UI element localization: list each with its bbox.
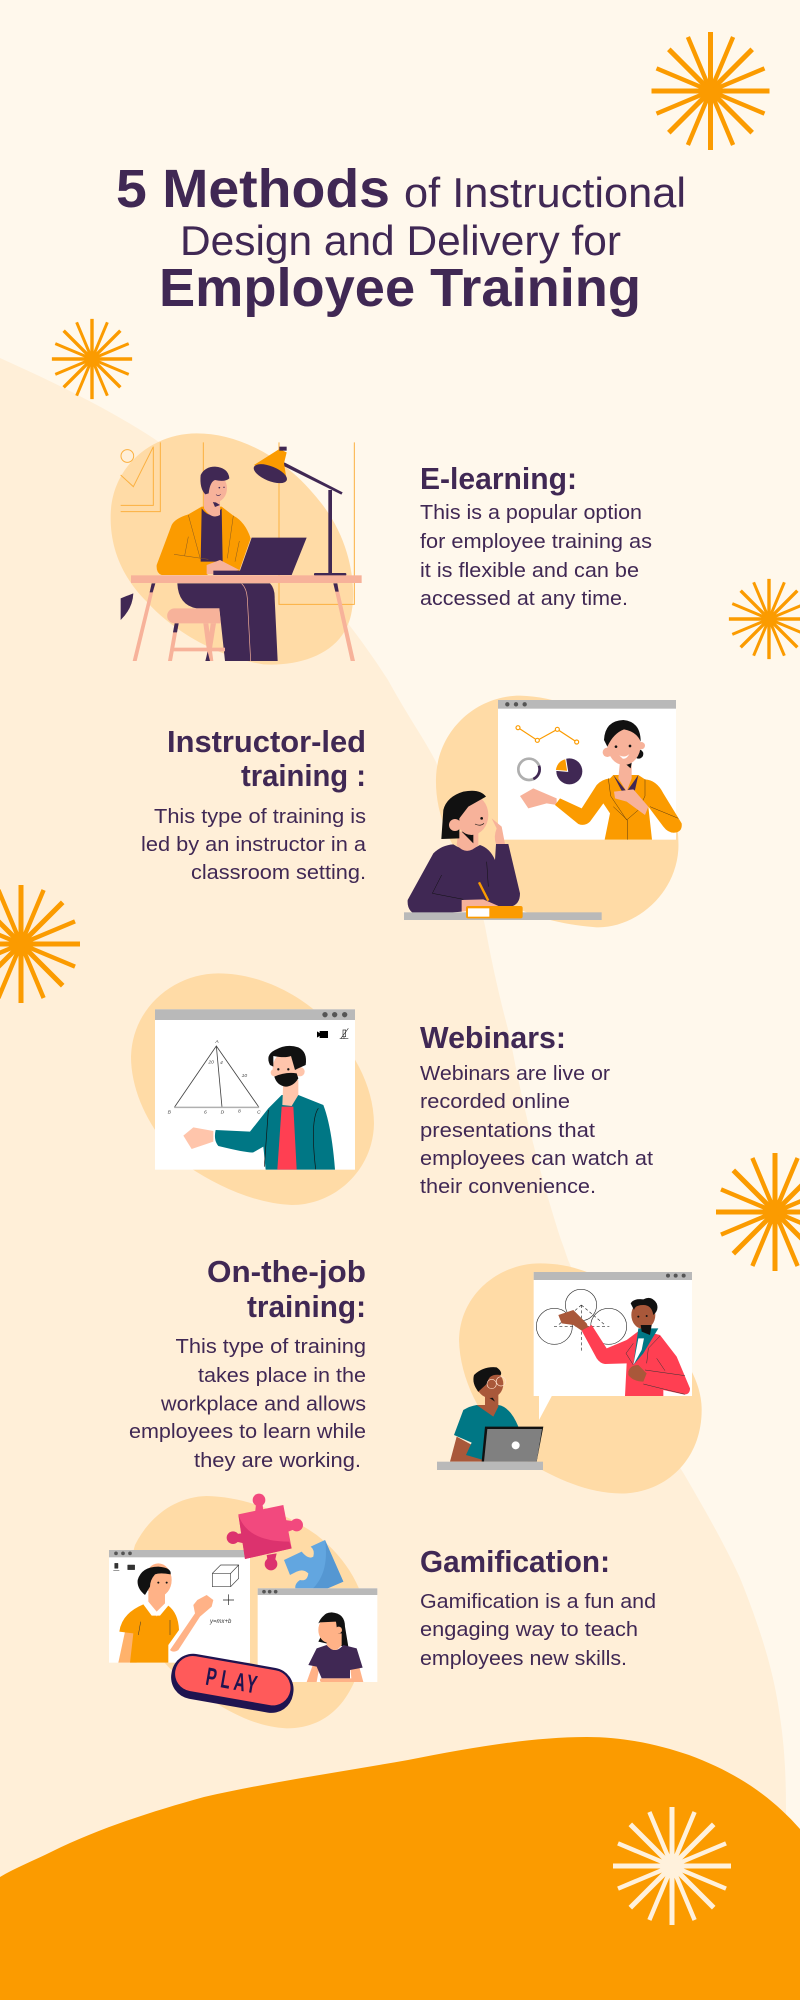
icon: camera xyxy=(317,1031,328,1038)
student man with laptop xyxy=(437,1367,543,1470)
heading: e-learning: E-learning: xyxy=(420,461,577,496)
text: gamification body: engaging way to teach xyxy=(420,1619,638,1641)
starburst: right lower xyxy=(716,1153,800,1271)
bottom orange wave xyxy=(0,1737,800,2000)
text: instructor-led body: This type of training is xyxy=(154,806,366,828)
triangle diagram: 4 xyxy=(220,1060,223,1066)
blob xyxy=(131,1496,367,1728)
heading: on-the-job: training: xyxy=(247,1289,366,1324)
starburst: left middle xyxy=(0,885,80,1003)
browser window xyxy=(498,700,676,840)
triangle diagram: C xyxy=(257,1109,261,1115)
donut chart xyxy=(518,759,540,780)
desk and book xyxy=(404,906,602,920)
title: Employee Training xyxy=(159,258,641,318)
plant leaf xyxy=(121,593,133,620)
text: webinars body: their convenience. xyxy=(420,1176,596,1198)
heading: on-the-job xyxy=(207,1254,366,1324)
heading: instructor-led: Instructor-led xyxy=(167,724,366,759)
triangle diagram: D xyxy=(221,1110,225,1116)
stool xyxy=(167,608,225,661)
desk xyxy=(131,575,362,661)
triangle diagram: 20 xyxy=(207,1059,214,1065)
triangle diagram: 8 xyxy=(238,1108,241,1114)
triangle diagram: A xyxy=(214,1039,219,1045)
text: on-the-job body: workplace and allows xyxy=(160,1394,366,1416)
heading: webinars: Webinars: xyxy=(420,1020,566,1055)
puzzle piece: blue xyxy=(284,1540,343,1592)
starburst: right middle xyxy=(729,579,800,659)
text: webinars body xyxy=(420,1063,653,1198)
triangle diagram: 10 xyxy=(242,1073,247,1079)
student woman xyxy=(408,791,520,916)
wall frames xyxy=(121,442,354,604)
triangle diagram xyxy=(168,1039,261,1116)
line chart xyxy=(516,726,579,744)
person in orange polo xyxy=(118,1563,213,1663)
text: instructor-led body: led by an instructor in a xyxy=(141,834,367,856)
text: gamification body xyxy=(420,1591,656,1670)
puzzle piece: pink xyxy=(227,1494,303,1570)
triangle diagram: B xyxy=(168,1109,172,1115)
title: Design and Delivery for xyxy=(180,217,621,264)
panel: on-the-job illustration xyxy=(437,1263,702,1493)
text: webinars body: employees can watch at xyxy=(420,1148,653,1170)
icon: mic and camera xyxy=(113,1563,135,1571)
text: on-the-job body: employees to learn while xyxy=(129,1421,366,1443)
text: webinars body: Webinars are live or xyxy=(420,1063,610,1085)
text: e-learning body: This is a popular option xyxy=(420,502,642,524)
cube, plus and formula: y=mx+b xyxy=(209,1619,232,1625)
blob xyxy=(459,1263,702,1493)
desk lamp xyxy=(251,447,346,576)
heading: instructor-led xyxy=(167,724,366,793)
text: on-the-job body: takes place in the xyxy=(198,1365,366,1387)
blob xyxy=(131,973,374,1205)
starburst: top right xyxy=(652,32,770,150)
blob xyxy=(111,433,353,665)
person in purple shirt xyxy=(307,1612,363,1682)
circles diagram xyxy=(536,1289,627,1352)
title: 5 Methods xyxy=(116,159,390,219)
pie chart xyxy=(555,758,582,784)
blob xyxy=(436,696,678,927)
starburst: upper left xyxy=(52,319,132,399)
text: gamification body: Gamification is a fun and xyxy=(420,1591,656,1613)
panel: e-learning illustration xyxy=(111,433,362,665)
triangle diagram: 6 xyxy=(204,1110,207,1116)
text: gamification body: employees new skills. xyxy=(420,1648,627,1670)
text: e-learning body: accessed at any time. xyxy=(420,588,628,610)
title xyxy=(116,159,686,318)
starburst: bottom white xyxy=(613,1807,731,1925)
text: e-learning body: it is flexible and can be xyxy=(420,560,639,582)
heading: on-the-job: On-the-job xyxy=(207,1254,366,1289)
text: on-the-job body xyxy=(129,1336,366,1472)
play button: PLAY xyxy=(204,1663,259,1699)
heading: gamification: Gamification: xyxy=(420,1544,610,1579)
text: e-learning body: for employee training as xyxy=(420,531,652,553)
text: webinars body: presentations that xyxy=(420,1120,595,1142)
title: of Instructional xyxy=(404,169,686,216)
browser window xyxy=(155,1009,355,1170)
heading: instructor-led: training : xyxy=(241,758,366,793)
text: instructor-led body: classroom setting. xyxy=(191,862,366,884)
panel: gamification illustration xyxy=(109,1494,377,1728)
text: on-the-job body: they are working. xyxy=(194,1450,361,1472)
laptop xyxy=(213,538,307,575)
bearded man xyxy=(183,1046,335,1170)
panel: webinars illustration xyxy=(131,973,374,1205)
person xyxy=(157,467,278,661)
speech bubble window xyxy=(534,1272,692,1420)
presenter man xyxy=(558,1298,690,1396)
icon: muted microphone xyxy=(340,1028,348,1039)
presenter woman xyxy=(520,720,682,840)
text: on-the-job body: This type of training xyxy=(176,1336,366,1358)
cube, plus and formula xyxy=(209,1565,239,1625)
text: webinars body: recorded online xyxy=(420,1091,570,1113)
window: right xyxy=(258,1588,377,1682)
play button xyxy=(168,1650,297,1716)
text: instructor-led body xyxy=(141,806,367,884)
text: e-learning body xyxy=(420,502,652,610)
window: left xyxy=(109,1550,250,1663)
panel: instructor-led illustration xyxy=(404,696,682,927)
